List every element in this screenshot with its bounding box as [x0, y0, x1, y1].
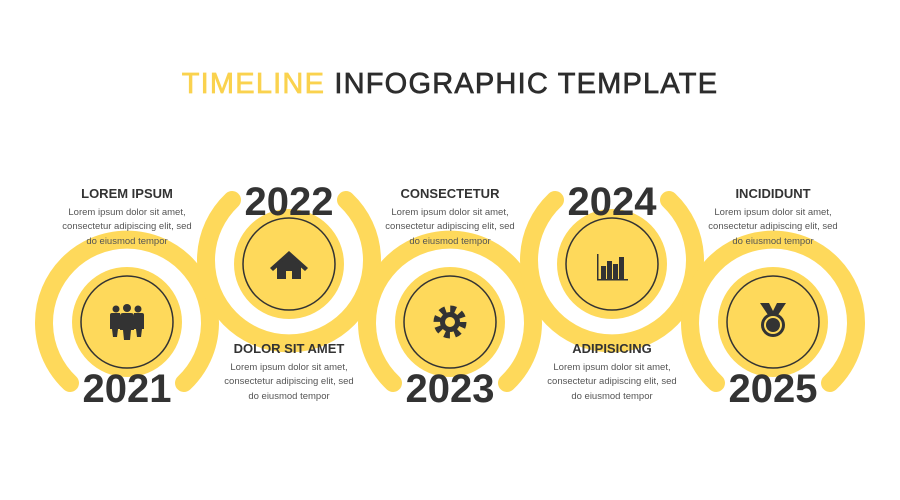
icon: house — [270, 251, 308, 279]
icon: medal — [760, 303, 786, 337]
text: lorem ipsum: do eiusmod tempor — [86, 236, 168, 247]
text: dolor sit amet: Lorem ipsum dolor sit amet, — [230, 362, 348, 373]
title: TIMELINE INFOGRAPHIC TEMPLATE — [182, 68, 718, 100]
rings — [44, 200, 856, 383]
text: incididunt — [708, 186, 838, 247]
text: dolor sit amet — [224, 341, 354, 402]
text: consectetur: Lorem ipsum dolor sit amet, — [391, 207, 509, 218]
text: lorem ipsum: consectetur adipiscing elit, sed — [62, 221, 192, 232]
text: incididunt: consectetur adipiscing elit, sed — [708, 221, 838, 232]
text: lorem ipsum: Lorem ipsum dolor sit amet, — [68, 207, 186, 218]
text: adipisicing: consectetur adipiscing elit, sed — [547, 376, 677, 387]
icon: people — [110, 304, 144, 340]
text: consectetur: consectetur adipiscing elit, sed — [385, 221, 515, 232]
step 2024 — [557, 180, 667, 319]
step 2023: 2023 — [406, 367, 494, 411]
text: incididunt: do eiusmod tempor — [732, 236, 814, 247]
icon: gear — [438, 310, 462, 334]
text: incididunt: INCIDIDUNT — [735, 186, 811, 201]
text: incididunt: Lorem ipsum dolor sit amet, — [714, 207, 832, 218]
text: adipisicing — [547, 341, 677, 402]
text: lorem ipsum — [62, 186, 192, 247]
text: adipisicing: Lorem ipsum dolor sit amet, — [553, 362, 671, 373]
text: dolor sit amet: DOLOR SIT AMET — [234, 341, 344, 356]
step 2022 — [234, 180, 344, 319]
step 2022: 2022 — [245, 180, 333, 224]
text: dolor sit amet: consectetur adipiscing elit, sed — [224, 376, 354, 387]
step 2024: 2024 — [568, 180, 657, 224]
text: adipisicing: do eiusmod tempor — [571, 391, 653, 402]
text: consectetur: CONSECTETUR — [401, 186, 500, 201]
step 2023 — [395, 267, 505, 411]
step 2025: 2025 — [729, 367, 817, 411]
text: consectetur: do eiusmod tempor — [409, 236, 491, 247]
step 2021 — [72, 267, 182, 411]
text: adipisicing: ADIPISICING — [572, 341, 652, 356]
text: consectetur — [385, 186, 515, 247]
text: dolor sit amet: do eiusmod tempor — [248, 391, 330, 402]
icon: bar chart — [597, 254, 628, 280]
step 2021: 2021 — [83, 367, 171, 411]
step 2025 — [718, 267, 828, 411]
text: lorem ipsum: LOREM IPSUM — [81, 186, 173, 201]
